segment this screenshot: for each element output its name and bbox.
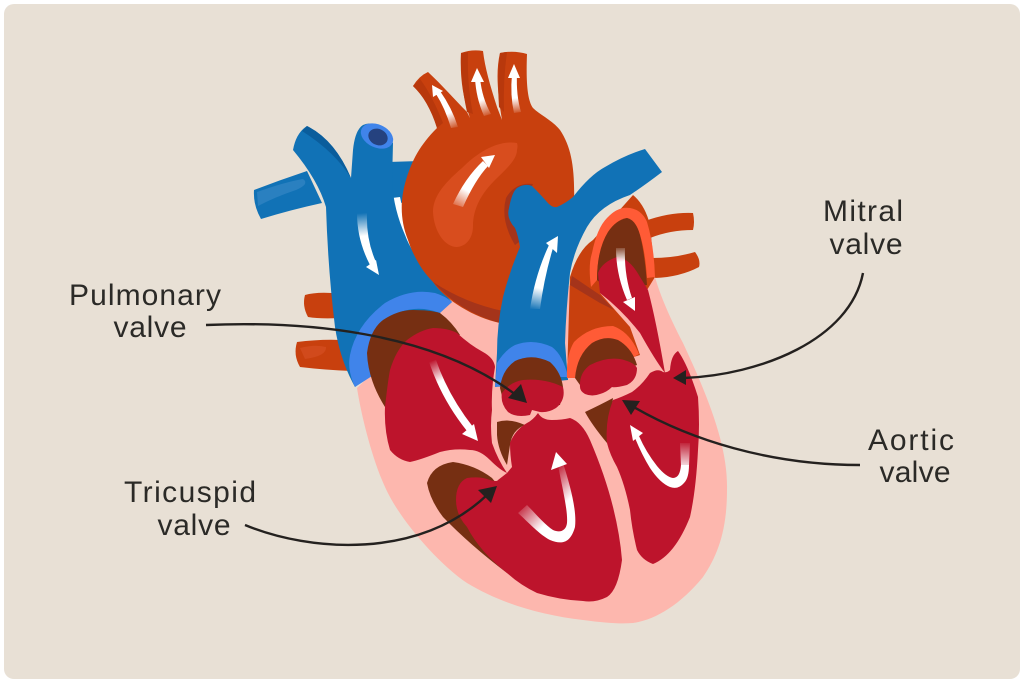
right ventricle brown lower <box>427 462 520 580</box>
flow arrow: left ventricle <box>630 425 690 488</box>
flow arrow: left atrium <box>616 248 635 311</box>
label: Aortic valve: Aortic <box>868 424 954 457</box>
callout line: tricuspid valve <box>245 486 497 545</box>
label: Mitral valve: Mitral <box>823 195 903 228</box>
aortic outer ring <box>567 326 639 378</box>
left atrium ring <box>590 208 655 287</box>
flow arrow: aorta branch 1 <box>432 85 458 128</box>
left atrium chamber red <box>598 257 665 373</box>
superior vena cava <box>293 118 452 387</box>
flow arrow: right atrium <box>429 360 478 441</box>
left branch vein blue <box>254 171 322 219</box>
right atrium brown <box>367 310 460 415</box>
right ventricle <box>456 413 622 602</box>
callout line: aortic valve <box>622 400 860 465</box>
flow arrow: pulmonary trunk <box>530 236 558 309</box>
light blue ring right atrium <box>349 292 452 387</box>
left ventricle <box>607 351 699 564</box>
flow arrow: aorta <box>453 155 495 207</box>
flow arrow: aorta branch 2 <box>471 68 491 116</box>
back blue vessel <box>388 161 420 245</box>
pulmonary valve dome <box>500 357 563 408</box>
callout line: mitral valve <box>673 273 863 385</box>
right atrium red <box>385 328 507 473</box>
vessel opening <box>357 118 397 154</box>
label: Mitral valve: valve <box>830 228 902 261</box>
left atrium back <box>567 195 655 378</box>
right ventricle top brown <box>497 421 525 465</box>
left veins <box>296 293 352 371</box>
flow arrow: aorta branch 3 <box>508 64 521 113</box>
left ventricle brown <box>585 398 613 443</box>
dark band left atrium <box>570 276 614 310</box>
aortic dome <box>575 338 637 392</box>
heart illustration <box>254 50 727 623</box>
right veins <box>645 213 700 278</box>
pulmonary valve cusps <box>502 380 564 416</box>
left atrium brown <box>597 218 647 290</box>
flow arrow: superior vena cava <box>357 213 379 275</box>
callout line: pulmonary valve <box>206 324 527 403</box>
aorta <box>402 50 574 323</box>
flow arrow: right ventricle <box>518 452 575 542</box>
label: Pulmonary valve: Pulmonary <box>69 279 221 312</box>
label: Tricuspid valve: valve <box>158 509 230 542</box>
aortic valve cusps <box>580 359 637 396</box>
label: Tricuspid valve: Tricuspid <box>124 476 256 509</box>
label: Pulmonary valve: valve <box>114 311 186 344</box>
pulmonary trunk <box>495 149 662 387</box>
label: Aortic valve: valve <box>880 456 950 489</box>
pink heart wall <box>357 277 727 623</box>
